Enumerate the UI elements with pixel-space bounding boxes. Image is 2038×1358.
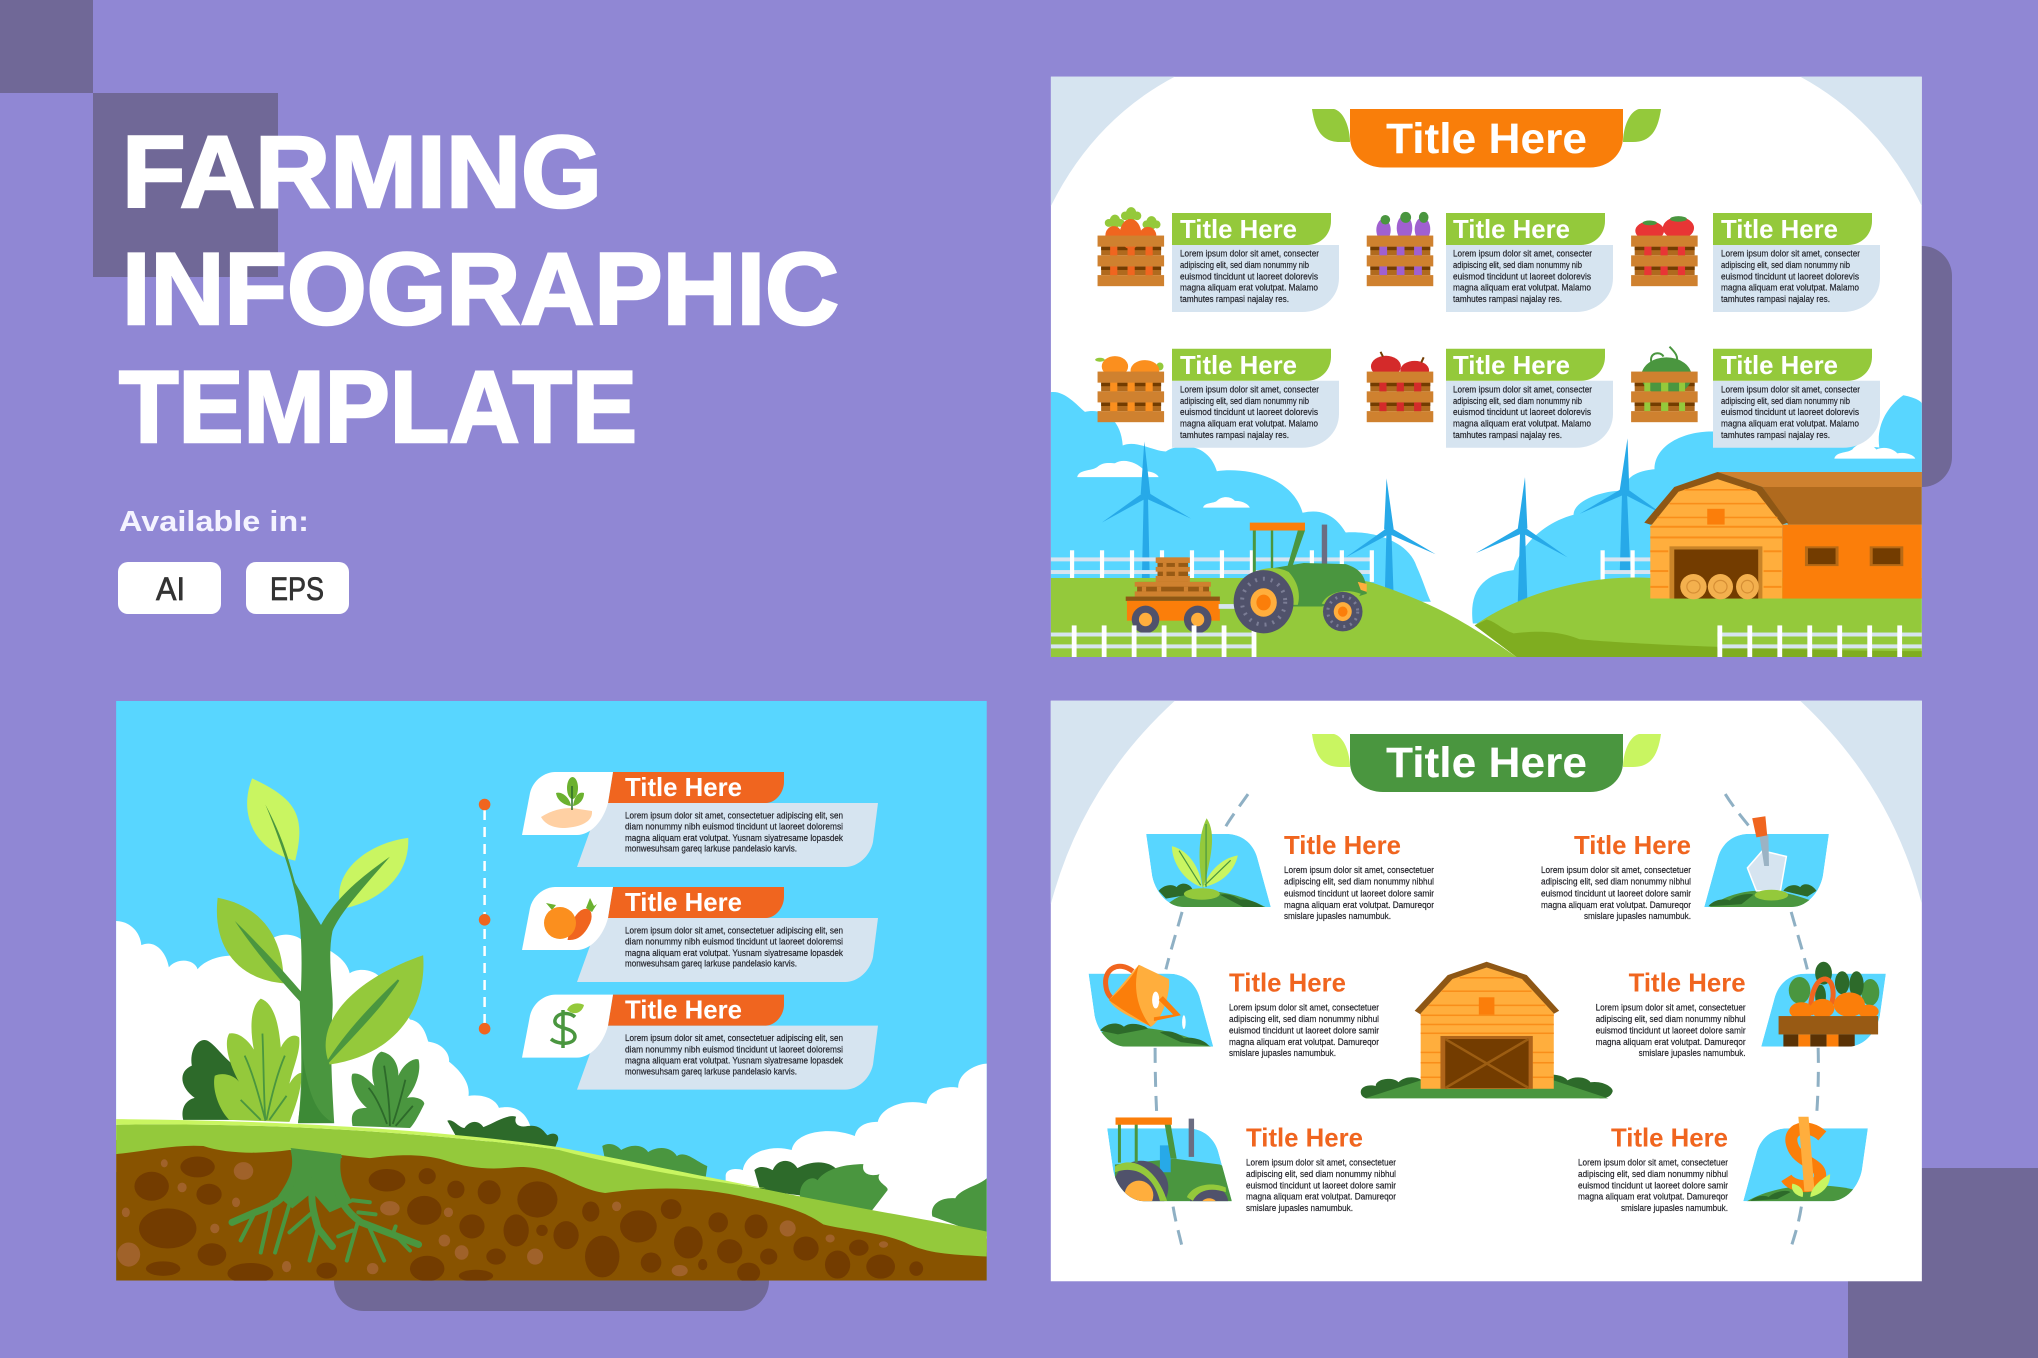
card: produce: monwesuhsam gareq larkuse pandelasio karvis. [625, 959, 797, 970]
step text 4: Title Here [1629, 968, 1746, 998]
card: money: magna aliquam erat volutpat. Yusnam siyatresame lopasdek [625, 1056, 843, 1067]
card: money: diam nonummy nibh euismod tincidunt ut laoreet doloremsi [625, 1044, 843, 1055]
card row 2 col 1: adipiscing elit, sed diam nonummy nib [1180, 396, 1309, 407]
step text 6: euismod tincidunt ut laoreet dolore samir [1578, 1180, 1729, 1191]
banner: title here [1312, 734, 1661, 792]
card row 1 col 2: euismod tincidunt ut laoreet dolorevis [1453, 271, 1591, 282]
card: money: Title Here [625, 995, 742, 1025]
step text 6: smislare jupasles namumbuk. [1621, 1203, 1728, 1214]
step text 2: adipiscing elit, sed diam nonummy nibhul [1541, 876, 1691, 887]
step text 4: smislare jupasles namumbuk. [1639, 1048, 1746, 1059]
card row 2 col 1: tamhutes rampasi najalay res. [1180, 430, 1289, 441]
card row 1 col 1 [1172, 213, 1339, 312]
step text 3: Title Here [1229, 968, 1346, 998]
decorative tab behind bottom-left panel [334, 1240, 769, 1311]
card: produce: diam nonummy nibh euismod tincidunt ut laoreet doloremsi [625, 937, 843, 948]
step text 3: magna aliquam erat volutpat. Damureqor [1229, 1037, 1380, 1048]
step text 5: smislare jupasles namumbuk. [1246, 1203, 1353, 1214]
card row 1 col 1: adipiscing elit, sed diam nonummy nib [1180, 260, 1309, 271]
card row 2 col 2: Lorem ipsum dolor sit amet, consecter [1453, 384, 1593, 396]
icon: dollar with leaf [551, 1003, 584, 1048]
title: INFOGRAPHIC [122, 232, 839, 346]
card row 2 col 3: Title Here [1721, 350, 1838, 380]
card row 2 col 3: adipiscing elit, sed diam nonummy nib [1721, 396, 1850, 407]
step text 5: adipiscing elit, sed diam nonummy nibhul [1246, 1169, 1396, 1180]
step text 6: adipiscing elit, sed diam nonummy nibhul [1578, 1169, 1728, 1180]
icon: watering can [1089, 965, 1214, 1048]
step text 2: smislare jupasles namumbuk. [1584, 911, 1691, 922]
farm illustration [1051, 77, 1922, 657]
crate: apples [1367, 352, 1433, 422]
step text 4: euismod tincidunt ut laoreet dolore samir [1596, 1025, 1746, 1036]
decorative square behind title [93, 93, 278, 277]
plant illustration [116, 701, 987, 1284]
decorative square top-left [0, 0, 93, 93]
step text 5: Title Here [1246, 1122, 1363, 1152]
step text 5: Lorem ipsum dolor sit amet, consectetuer [1246, 1158, 1397, 1169]
title: FARMING [122, 115, 602, 229]
card: seedling: magna aliquam erat volutpat. Yusnam siyatresame lopasdek [625, 833, 843, 844]
panel: crates and farm [1051, 77, 1922, 657]
step text 2: Lorem ipsum dolor sit amet, consectetuer [1541, 865, 1692, 876]
card: produce: Lorem ipsum dolor sit amet, consectetuer adipiscing elit, sen [625, 925, 843, 936]
card: seedling: diam nonummy nibh euismod tincidunt ut laoreet doloremsi [625, 822, 843, 833]
step text 3: Lorem ipsum dolor sit amet, consectetuer [1229, 1003, 1380, 1014]
step text 1: adipiscing elit, sed diam nonummy nibhul [1284, 876, 1434, 887]
step text 6: Title Here [1611, 1122, 1728, 1152]
card row 2 col 2: adipiscing elit, sed diam nonummy nib [1453, 396, 1582, 407]
card row 1 col 2: tamhutes rampasi najalay res. [1453, 294, 1562, 305]
step text 4: Lorem ipsum dolor sit amet, consectetuer [1596, 1003, 1746, 1014]
roots [278, 1150, 353, 1212]
banner: title here: Title Here [1386, 115, 1587, 163]
step text 4: magna aliquam erat volutpat. Damureqor [1596, 1037, 1746, 1048]
title [119, 115, 839, 464]
card: seedling: Title Here [625, 772, 742, 802]
title: TEMPLATE [119, 350, 637, 464]
available in label: Available in: [119, 506, 309, 538]
card: money [522, 995, 878, 1090]
timeline [479, 799, 490, 1034]
barn [1717, 472, 1922, 525]
step text 5: magna aliquam erat volutpat. Damureqor [1246, 1191, 1397, 1202]
card row 1 col 2: magna aliquam erat volutpat. Malamo [1453, 283, 1591, 294]
card: money: Lorem ipsum dolor sit amet, consectetuer adipiscing elit, sen [625, 1033, 843, 1044]
card row 2 col 2: magna aliquam erat volutpat. Malamo [1453, 418, 1591, 430]
badge: AI [118, 562, 221, 614]
step text 5 [1246, 1122, 1397, 1214]
card row 2 col 2: Title Here [1453, 350, 1570, 380]
decorative tab behind top-right panel [1880, 246, 1952, 487]
grass [116, 1124, 987, 1257]
panel: farming steps [1051, 701, 1922, 1281]
crate: carrots [1098, 207, 1164, 286]
icon: seedling [1146, 818, 1271, 912]
crate: oranges [1095, 356, 1164, 422]
icon: carrot crate [1761, 962, 1886, 1050]
card row 2 col 1 [1172, 349, 1339, 448]
step text 1: euismod tincidunt ut laoreet dolore samir [1284, 888, 1435, 899]
step text 4: adipiscing elit, sed diam nonummy nibhul [1596, 1014, 1746, 1025]
card row 2 col 3: euismod tincidunt ut laoreet dolorevis [1721, 407, 1859, 418]
card row 2 col 3: tamhutes rampasi najalay res. [1721, 430, 1830, 441]
step text 2 [1541, 830, 1692, 922]
card row 1 col 2 [1446, 213, 1613, 312]
bushes [182, 1040, 239, 1120]
card row 1 col 3 [1713, 213, 1880, 312]
barn [1361, 962, 1613, 1098]
card: seedling [522, 772, 878, 867]
card row 1 col 2: Title Here [1453, 214, 1570, 244]
step text 1 [1284, 830, 1435, 922]
step text 1: smislare jupasles namumbuk. [1284, 911, 1391, 922]
card: seedling: Lorem ipsum dolor sit amet, consectetuer adipiscing elit, sen [625, 810, 843, 821]
card row 2 col 2: tamhutes rampasi najalay res. [1453, 430, 1562, 441]
card row 1 col 2: Lorem ipsum dolor sit amet, consecter [1453, 249, 1593, 260]
card row 1 col 1: tamhutes rampasi najalay res. [1180, 294, 1289, 305]
step text 4 [1596, 968, 1746, 1059]
icon: dollar sprout [1743, 1117, 1868, 1203]
plant [352, 1052, 424, 1128]
icon: shovel [1704, 816, 1829, 912]
badge: EPS: EPS [270, 571, 324, 607]
card row 1 col 3: adipiscing elit, sed diam nonummy nib [1721, 260, 1850, 271]
step text 2: euismod tincidunt ut laoreet dolore samir [1541, 888, 1692, 899]
card row 1 col 3: Lorem ipsum dolor sit amet, consecter [1721, 249, 1861, 260]
step text 6: magna aliquam erat volutpat. Damureqor [1578, 1191, 1729, 1202]
card row 1 col 1: Title Here [1180, 214, 1297, 244]
card row 2 col 3: Lorem ipsum dolor sit amet, consecter [1721, 384, 1861, 396]
crate: tomatoes [1631, 216, 1698, 286]
tractor [1322, 525, 1327, 564]
step text 1: Title Here [1284, 830, 1401, 860]
card row 1 col 3: Title Here [1721, 214, 1838, 244]
banner: title here: Title Here [1386, 739, 1587, 787]
step text 2: magna aliquam erat volutpat. Damureqor [1541, 900, 1692, 911]
step text 3: euismod tincidunt ut laoreet dolore samir [1229, 1025, 1380, 1036]
badge: EPS [246, 562, 349, 614]
step text 3: adipiscing elit, sed diam nonummy nibhul [1229, 1014, 1379, 1025]
card row 1 col 2: adipiscing elit, sed diam nonummy nib [1453, 260, 1582, 271]
card row 1 col 3: magna aliquam erat volutpat. Malamo [1721, 283, 1859, 294]
icon: orange and carrot [544, 898, 597, 939]
icon: hand with sprout [541, 777, 592, 828]
step text 6 [1578, 1122, 1729, 1214]
step text 1: magna aliquam erat volutpat. Damureqor [1284, 900, 1435, 911]
icon: tractor [1107, 1117, 1232, 1202]
card: seedling: monwesuhsam gareq larkuse pandelasio karvis. [625, 844, 797, 855]
card row 2 col 3 [1713, 349, 1880, 448]
card row 2 col 1: magna aliquam erat volutpat. Malamo [1180, 418, 1318, 430]
step text 3: smislare jupasles namumbuk. [1229, 1048, 1336, 1059]
card row 1 col 1: euismod tincidunt ut laoreet dolorevis [1180, 271, 1318, 282]
crate: watermelon [1631, 347, 1698, 422]
card row 1 col 1: Lorem ipsum dolor sit amet, consecter [1180, 249, 1320, 260]
banner: title here [1312, 109, 1661, 168]
card: produce [522, 887, 878, 982]
card row 1 col 1: magna aliquam erat volutpat. Malamo [1180, 283, 1318, 294]
card row 2 col 1: Lorem ipsum dolor sit amet, consecter [1180, 384, 1320, 396]
decorative square bottom-right [1848, 1168, 2038, 1358]
card row 1 col 3: tamhutes rampasi najalay res. [1721, 294, 1830, 305]
crates [1095, 207, 1698, 422]
soil [116, 1136, 987, 1281]
step text 3 [1229, 968, 1380, 1059]
card row 2 col 2 [1446, 349, 1613, 448]
badge: AI: AI [156, 571, 185, 607]
card row 1 col 3: euismod tincidunt ut laoreet dolorevis [1721, 271, 1859, 282]
step text 2: Title Here [1574, 830, 1691, 860]
step text 6: Lorem ipsum dolor sit amet, consectetuer [1578, 1158, 1729, 1169]
card: produce: Title Here [625, 887, 742, 917]
card row 2 col 2: euismod tincidunt ut laoreet dolorevis [1453, 407, 1591, 418]
card row 2 col 1: euismod tincidunt ut laoreet dolorevis [1180, 407, 1318, 418]
panel background and illustrations [1051, 701, 1922, 1281]
wagon with crates [1158, 557, 1188, 582]
card row 2 col 3: magna aliquam erat volutpat. Malamo [1721, 418, 1859, 430]
card: produce: magna aliquam erat volutpat. Yusnam siyatresame lopasdek [625, 948, 843, 959]
crate: eggplants [1367, 212, 1433, 286]
step text 5: euismod tincidunt ut laoreet dolore samir [1246, 1180, 1397, 1191]
card row 2 col 1: Title Here [1180, 350, 1297, 380]
panel: plant and soil [116, 701, 987, 1284]
card: money: monwesuhsam gareq larkuse pandelasio karvis. [625, 1066, 797, 1077]
step text 1: Lorem ipsum dolor sit amet, consectetuer [1284, 865, 1435, 876]
